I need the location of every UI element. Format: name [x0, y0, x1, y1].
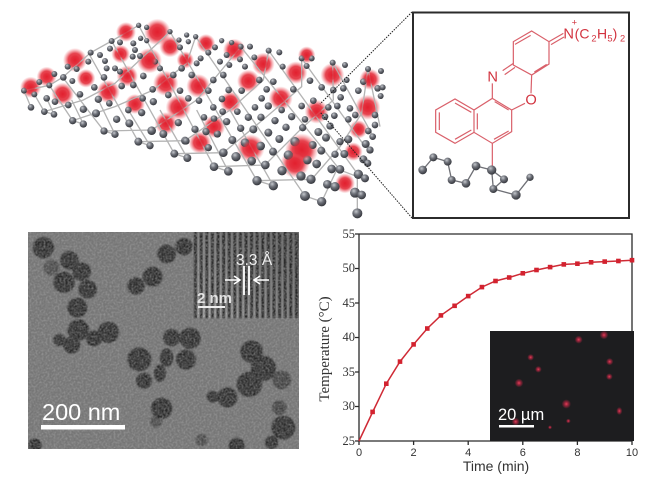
- scale bar: 200 nm: [42, 399, 120, 425]
- scale bar: [41, 404, 125, 430]
- atom labels: 2: [591, 34, 597, 44]
- x tick labels: 10: [626, 447, 638, 459]
- atom labels: 2: [620, 34, 625, 44]
- x tick labels: 6: [520, 447, 526, 459]
- dotted callout lines: [320, 12, 412, 218]
- dark nanoparticles: [28, 237, 295, 454]
- y tick labels: 35: [342, 365, 355, 379]
- atom labels: (C: [575, 25, 589, 41]
- x tick labels: 8: [574, 447, 580, 459]
- HRTEM inset: [194, 232, 299, 318]
- panel: molecule zoom box: [413, 12, 629, 218]
- y tick labels: 25: [342, 434, 355, 448]
- y tick labels: 40: [342, 330, 355, 344]
- y tick labels: [342, 227, 355, 448]
- plot frame and ticks: [355, 234, 632, 445]
- red dye glows: [20, 19, 381, 193]
- atom labels: ): [613, 25, 617, 41]
- y axis title: Temperature (°C): [317, 296, 333, 402]
- carbon atoms: [21, 23, 386, 218]
- atom labels: H: [597, 25, 607, 41]
- x tick labels: 2: [411, 447, 417, 459]
- panel: TEM micrograph: [28, 232, 299, 454]
- fluorescence microscopy inset: [490, 331, 634, 441]
- lattice spacing label: 3.3 Å: [236, 252, 273, 269]
- x tick labels: [356, 447, 638, 459]
- atom labels: N: [487, 69, 498, 85]
- inset scale bar: 2 nm: [197, 290, 232, 307]
- atom labels: O: [525, 92, 537, 108]
- y tick labels: 45: [342, 296, 355, 310]
- panel: graphene sheet with dye molecules: [20, 19, 386, 218]
- atom labels: +: [572, 17, 577, 27]
- lattice spacing arrows: [225, 266, 269, 295]
- scale bar: [499, 425, 534, 428]
- heating curve: [359, 258, 634, 441]
- x tick labels: 4: [465, 447, 471, 459]
- alkyl chain: [418, 153, 534, 200]
- panel: temperature chart: [317, 227, 638, 474]
- x tick labels: 0: [356, 447, 362, 459]
- y tick labels: 55: [342, 227, 355, 241]
- atom labels: [487, 17, 625, 108]
- y tick labels: 50: [342, 261, 355, 275]
- foreground red glows: [24, 23, 377, 190]
- y tick labels: 30: [342, 399, 355, 413]
- fluorescent spots: [512, 331, 622, 429]
- grain: [28, 232, 299, 449]
- scale label: 20 µm: [498, 406, 544, 424]
- x axis title: Time (min): [463, 458, 529, 474]
- Nile red structure: [418, 17, 625, 200]
- carbon bonds: [24, 25, 380, 213]
- atom labels: 5: [607, 34, 613, 44]
- atom labels: N: [563, 26, 574, 42]
